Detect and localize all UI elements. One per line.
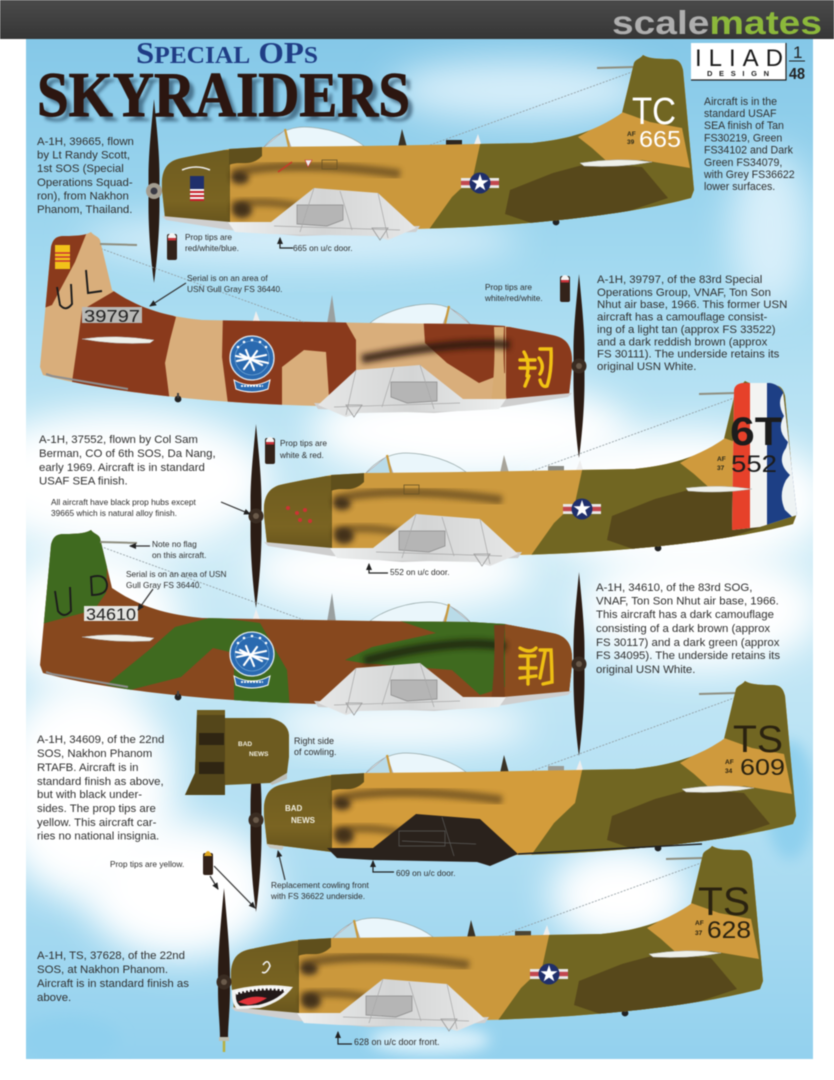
text: aircraft 3 description: USAF SEA finish. — [39, 476, 128, 488]
serial panel — [84, 606, 138, 621]
note: prop tips aircraft 3: Prop tips are — [280, 438, 327, 448]
tail letters UL — [57, 270, 102, 308]
shark mouth — [232, 985, 293, 1009]
text: aircraft 2 description: A-1H, 39797, of the 83rd Special — [597, 274, 762, 286]
text: aircraft 2 description: Operations Group, VNAF, Ton Son — [597, 287, 771, 299]
tail code: TC — [632, 91, 676, 133]
aircraft 1: A-1H 39665 TC: 39 — [627, 139, 635, 146]
text: finish notes: standard USAF — [704, 108, 777, 120]
Iliad Design logo: DESIGN — [707, 69, 769, 78]
yellow nose marking — [520, 349, 551, 386]
text: aircraft 5 description: A-1H, 34609, of the 22nd — [37, 734, 164, 746]
note: serial aircraft 2 — [150, 273, 282, 306]
note: yellow prop tips — [110, 851, 255, 908]
note: serial aircraft 4: Gull Gray FS 36440. — [126, 580, 202, 590]
text: aircraft 1 description: by Lt Randy Scott, — [37, 150, 130, 162]
text: aircraft 3 description: early 1969. Aircraft is in standard — [39, 462, 205, 474]
detail: right side of cowling: NEWS — [249, 751, 269, 758]
text: aircraft 2 description: aircraft has a camouflage consist- — [597, 312, 768, 324]
note: 552 door: 552 on u/c door. — [390, 567, 450, 577]
text: aircraft 4 description: consisting of a dark brown (approx — [596, 623, 770, 635]
propeller — [248, 728, 264, 912]
text: aircraft 5 description: RTAFB. Aircraft is in — [37, 762, 138, 774]
aircraft 6: A-1H 37628 TS sharkmouth: AF — [695, 920, 704, 927]
aircraft 1: A-1H 39665 TC: AF — [627, 131, 636, 138]
text: aircraft 2 description: Nhut air base, 1966. This former USN — [597, 299, 787, 311]
text: aircraft 5 description: standard finish as above, — [37, 776, 164, 788]
callout notes and arrows — [51, 232, 570, 1047]
brown camouflage — [34, 227, 572, 412]
scalemates watermark logo: scale mates — [612, 4, 822, 41]
text: aircraft 1 description: A-1H, 39665, flown — [37, 136, 134, 148]
aircraft 3: A-1H 37552 6T: AF — [717, 456, 726, 463]
national insignia — [461, 172, 499, 194]
text: finish notes: FS30219, Green — [704, 132, 782, 144]
tail code 6T: 6T — [730, 410, 782, 454]
aircraft 6: A-1H 37628 TS sharkmouth — [216, 831, 769, 1052]
serial panel — [82, 307, 142, 323]
aircraft 5: A-1H 34609 TS Bad News — [248, 666, 802, 912]
note: serial aircraft 2: Serial is on an area of — [187, 273, 268, 283]
note: 609 door — [373, 861, 456, 878]
note: serial aircraft 4: Serial is on an area of USN — [126, 569, 227, 579]
note: prop hubs: All aircraft have black prop hubs except — [51, 497, 197, 507]
propeller — [146, 99, 162, 283]
note: prop tips aircraft 3: white & red. — [279, 450, 324, 460]
text: aircraft 4 description: FS 30117) and a dark green (approx — [596, 637, 780, 649]
note: prop tips aircraft 3 — [265, 437, 327, 464]
text: aircraft 3 description: A-1H, 37552, flown by Col Sam — [39, 434, 198, 446]
aircraft 3: A-1H 37552 6T: 37 — [717, 465, 725, 472]
title: Skyraiders: SKYRAIDERS — [37, 59, 410, 130]
propeller — [572, 274, 586, 458]
text: aircraft 2 description: and a dark reddish brown (approx — [597, 336, 768, 348]
detail: right side of cowling: BAD — [238, 741, 252, 748]
mission markings — [286, 506, 312, 523]
aircraft 5: A-1H 34609 TS Bad News: AF — [725, 759, 734, 766]
nose art flag — [182, 167, 210, 201]
aircraft 3: A-1H 37552 6T: 552 — [731, 451, 777, 478]
text: aircraft 6 description: A-1H, TS, 37628, of the 22nd — [37, 950, 185, 962]
text: finish notes: Aircraft is in the — [704, 96, 777, 108]
propeller — [572, 572, 586, 756]
Iliad Design logo — [691, 43, 805, 83]
Vietnamese flag on fin — [55, 245, 70, 269]
text: aircraft 2 description: original USN White. — [597, 361, 696, 373]
propeller — [248, 424, 264, 608]
note: 628 door: 628 on u/c door front. — [354, 1037, 440, 1047]
text: aircraft 4 description: VNAF, Ton Son Nhut air base, 1966. — [596, 596, 779, 608]
note: 628 door — [338, 1032, 440, 1047]
Iliad Design logo: ILIAD — [695, 45, 783, 72]
aircraft 5: A-1H 34609 TS Bad News: NEWS — [291, 816, 316, 825]
text: aircraft 2 description: FS 30111). The underside retains its — [597, 348, 780, 360]
text: aircraft 4 description: original USN White. — [596, 664, 695, 676]
Iliad Design logo: 1 — [793, 43, 802, 62]
note: 665 door — [280, 238, 353, 253]
note: prop hubs — [51, 497, 250, 518]
text: aircraft 4 description: FS 34095). The underside retains its — [596, 650, 780, 662]
text: aircraft 1 description: 1st SOS (Special — [37, 163, 124, 175]
aircraft 4: A-1H 34610 UD — [34, 515, 586, 756]
text: aircraft 3 description: Berman, CO of 6th SOS, Da Nang, — [39, 448, 216, 460]
aircraft 1: A-1H 39665 TC: 665 — [639, 126, 681, 152]
text: aircraft 1 description: Phanom, Thailand. — [37, 204, 132, 216]
aircraft 4: A-1H 34610 UD: 34610 — [86, 605, 136, 624]
text: aircraft 2 description: ing of a light tan (approx FS 33522) — [597, 324, 776, 336]
text: aircraft 5 description: SOS, Nakhon Phanom — [37, 748, 152, 760]
cowling lettering: BAD — [285, 804, 303, 813]
text: finish notes: SEA finish of Tan — [704, 120, 784, 132]
text: aircraft 6 description: above. — [37, 992, 71, 1004]
note: yellow prop tips: Prop tips are yellow. — [110, 859, 184, 869]
tricolour rudder — [731, 382, 798, 531]
note: prop tips aircraft 1 — [167, 232, 239, 260]
text: aircraft 4 description: A-1H, 34610, of the 83rd SOG, — [596, 582, 752, 594]
aircraft 2: A-1H 39797 UL — [34, 227, 586, 458]
text: finish notes: FS34102 and Dark — [704, 144, 794, 156]
squadron badge — [230, 632, 274, 688]
note: 609 door: 609 on u/c door. — [396, 868, 456, 878]
note: 665 door: 665 on u/c door. — [293, 243, 353, 253]
top header bar — [0, 0, 834, 39]
text: finish notes: Green FS34079, — [704, 157, 782, 169]
green camouflage — [43, 530, 506, 704]
text: aircraft 6 description: SOS, at Nakhon Phanom. — [37, 964, 168, 976]
note: prop tips aircraft 1: red/white/blue. — [185, 243, 239, 253]
title: Special Ops: SPECIAL OPS — [136, 35, 318, 70]
aircraft 2: A-1H 39797 UL: 39797 — [84, 306, 140, 326]
note: prop tips aircraft 2: Prop tips are — [485, 282, 532, 292]
text: aircraft 5 description: but with black under- — [37, 789, 142, 801]
text: aircraft 1 description: ron), from Nakhon — [37, 190, 129, 202]
note: right side of cowling: Right side — [294, 736, 334, 746]
note: prop tips aircraft 2: white/red/white. — [484, 293, 543, 303]
squadron badge — [230, 336, 274, 392]
tail letters UD — [55, 576, 107, 615]
tail code TS: TS — [698, 880, 750, 924]
Iliad Design logo: 48 — [789, 66, 805, 83]
note: serial aircraft 2: USN Gull Gray FS 36440. — [187, 284, 282, 294]
aircraft 6: A-1H 37628 TS sharkmouth: 628 — [707, 917, 751, 944]
text: aircraft 5 description: yellow. This aircraft car- — [37, 817, 157, 829]
note: replacement cowling — [270, 851, 369, 901]
detail: right side of cowling — [185, 710, 289, 795]
aircraft 6: A-1H 37628 TS sharkmouth: 37 — [695, 930, 703, 937]
note: no flag — [130, 539, 206, 560]
aircraft 5: A-1H 34609 TS Bad News: 34 — [725, 768, 733, 775]
note: replacement cowling: with FS 36622 underside. — [270, 891, 365, 901]
note: prop tips aircraft 1: Prop tips are — [185, 232, 232, 242]
note: prop tips aircraft 2 — [484, 275, 570, 303]
text: finish notes: with Grey FS36622 — [703, 169, 795, 181]
text: aircraft 6 description: Aircraft is in standard finish as — [37, 978, 189, 990]
title: Skyraiders: SKYRAIDERS — [42, 64, 415, 135]
note: replacement cowling: Replacement cowling front — [271, 880, 369, 890]
text: aircraft 5 description: sides. The prop tips are — [37, 803, 156, 815]
note: 552 door — [369, 564, 450, 577]
black underside — [327, 814, 518, 866]
text: aircraft 1 description: Operations Squad- — [37, 177, 133, 189]
text: aircraft 5 description: ries no national insignia. — [37, 830, 159, 842]
note: no flag: on this aircraft. — [152, 550, 206, 560]
note: prop hubs: 39665 which is natural alloy finish. — [51, 508, 177, 518]
note: serial aircraft 4 — [126, 569, 227, 610]
note: no flag: Note no flag — [152, 539, 197, 549]
tail code TS: TS — [733, 719, 783, 761]
aircraft 3: A-1H 37552 6T — [248, 366, 805, 608]
note: right side of cowling: of cowling. — [294, 747, 337, 757]
propeller — [216, 888, 232, 1052]
text: finish notes: lower surfaces. — [704, 181, 775, 193]
yellow nose marking — [520, 648, 552, 684]
aircraft 1: A-1H 39665 TC — [146, 40, 700, 283]
text: aircraft 4 description: This aircraft has a dark camouflage — [596, 609, 774, 621]
aircraft 5: A-1H 34609 TS Bad News: 609 — [740, 754, 785, 780]
